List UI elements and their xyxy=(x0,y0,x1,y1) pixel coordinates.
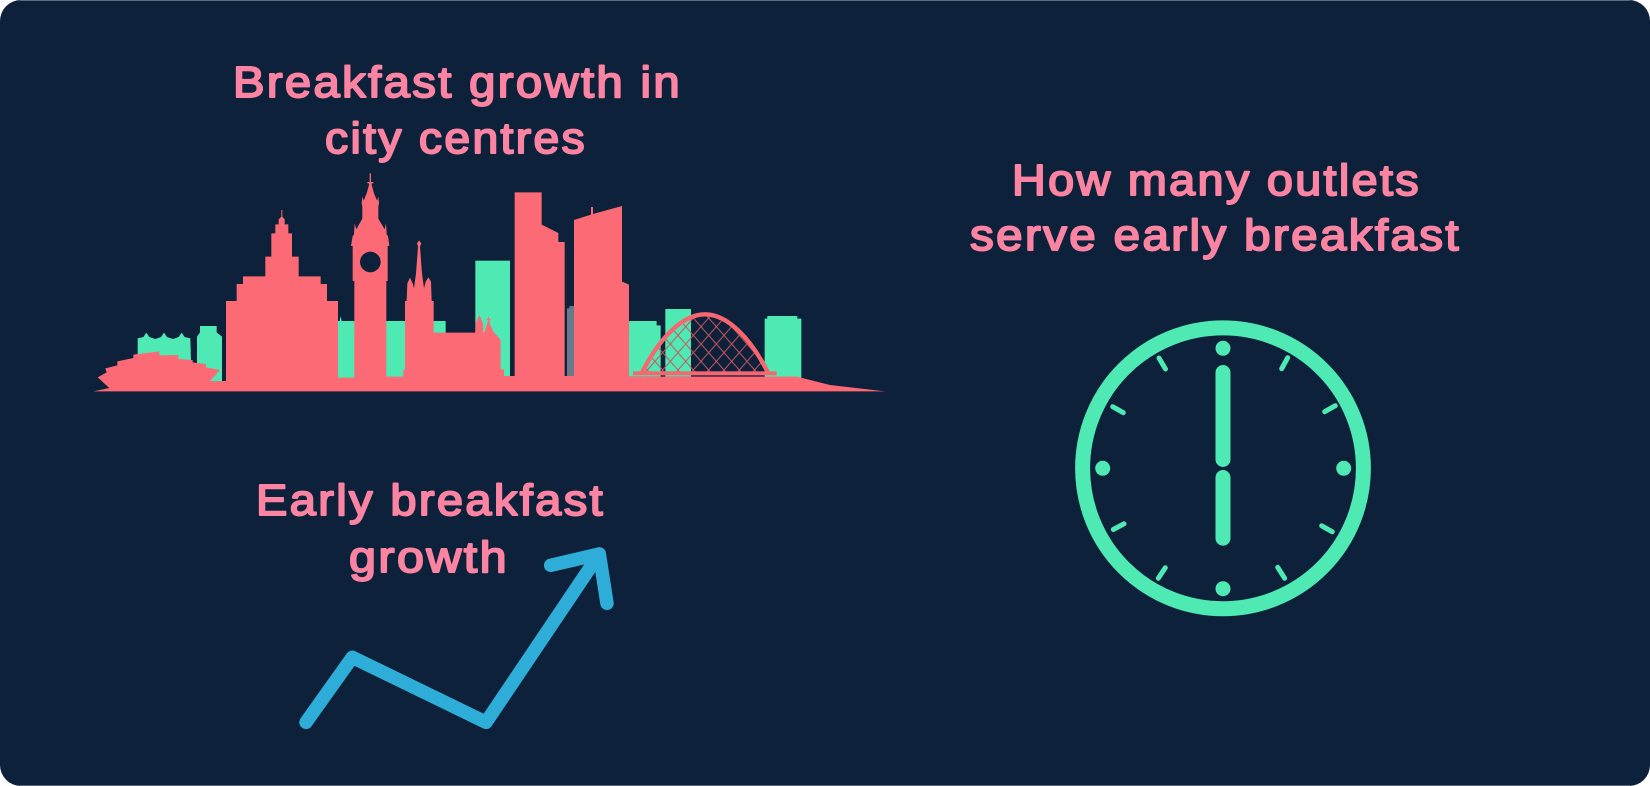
heading: early breakfast growth xyxy=(256,476,605,582)
city skyline illustration xyxy=(93,173,885,391)
heading: how many outlets serve early breakfast: How many outlets xyxy=(1012,156,1421,205)
clock: hour dots xyxy=(1095,341,1351,596)
clock: minute ticks xyxy=(1113,358,1335,578)
icon: clock showing six o'clock xyxy=(1083,328,1363,609)
heading: early breakfast growth: growth xyxy=(349,533,509,582)
heading: breakfast growth in city centres: city centres xyxy=(325,114,587,163)
heading: how many outlets serve early breakfast xyxy=(970,156,1461,260)
heading: breakfast growth in city centres xyxy=(233,58,682,163)
clock: rim xyxy=(1083,328,1363,609)
heading: how many outlets serve early breakfast: serve early breakfast xyxy=(970,211,1461,260)
skyline: foreground red buildings xyxy=(93,173,885,391)
skyline: arched bridge xyxy=(633,314,777,375)
skyline: background green buildings xyxy=(138,261,801,382)
clock: hands xyxy=(1216,372,1230,538)
skyline: clock tower face xyxy=(360,252,381,272)
icon: rising growth arrow xyxy=(306,554,607,722)
heading: breakfast growth in city centres: Breakfast growth in xyxy=(233,58,682,107)
heading: early breakfast growth: Early breakfast xyxy=(256,476,605,525)
